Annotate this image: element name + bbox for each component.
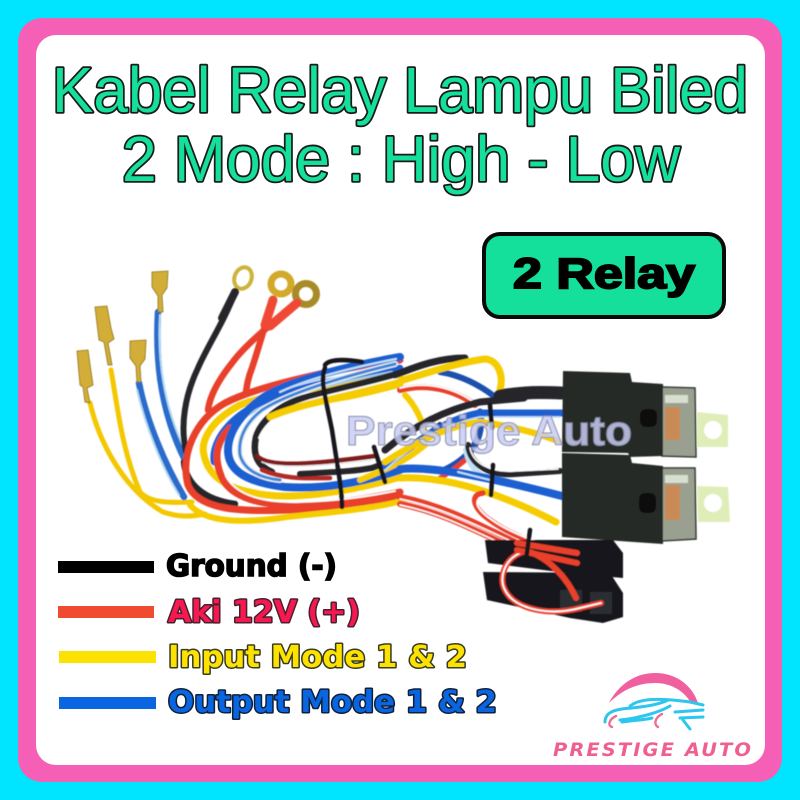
terminal: female 2 [152,271,168,312]
terminal: ring red 1 [271,274,291,294]
fuse holders [483,540,623,623]
logo wheels [609,714,662,727]
logo arc [609,673,698,703]
relay 1 [562,371,728,457]
right wire bundle [257,358,577,564]
logo name: PRESTIGE AUTO [553,739,753,761]
legend row: ground: Ground (-) [166,549,337,584]
terminal: ring black [231,265,255,291]
terminal: ring red 2 [296,284,316,304]
relay body [562,453,663,544]
terminal insulation sleeves [222,292,297,326]
relay tab [697,486,730,522]
terminals [77,265,316,403]
legend row: aki [58,595,360,630]
relay tab [697,412,728,447]
relay clear window [662,387,696,457]
terminal: blade 2 [95,306,114,365]
logo [553,673,753,761]
wire: red terminals [208,300,297,410]
terminal: blade 1 [77,350,93,403]
relay body [562,371,663,457]
cable ties [323,360,530,560]
product photo: wiring harness with relays [77,265,730,623]
relay slot [639,493,656,513]
relay clear window [662,468,696,541]
wire: blue terminal [137,312,186,497]
badge: 2 Relay [484,234,724,317]
title [52,54,748,195]
watermark: Prestige Auto [346,407,632,454]
wire: yellow left [90,370,205,516]
wire: black terminal [183,292,235,452]
legend row: output: Output Mode 1 & 2 [168,685,497,720]
logo car [605,699,703,729]
title: Kabel Relay Lampu Biled [52,54,748,126]
legend row: aki: Aki 12V (+) [168,595,360,630]
title: 2 Mode : High - Low [122,123,681,195]
legend row: ground [58,549,337,584]
nested wire hairpins [184,357,405,521]
fuse wire loop [502,543,601,611]
relay slot [640,409,657,427]
fuse socket [560,590,612,614]
legend [58,549,497,720]
terminal wires [90,292,297,516]
terminal: female 1 [130,340,146,382]
legend row: input: Input Mode 1 & 2 [168,640,467,675]
relay 2 [562,453,730,544]
badge: 2 Relay: 2 Relay [513,250,695,298]
